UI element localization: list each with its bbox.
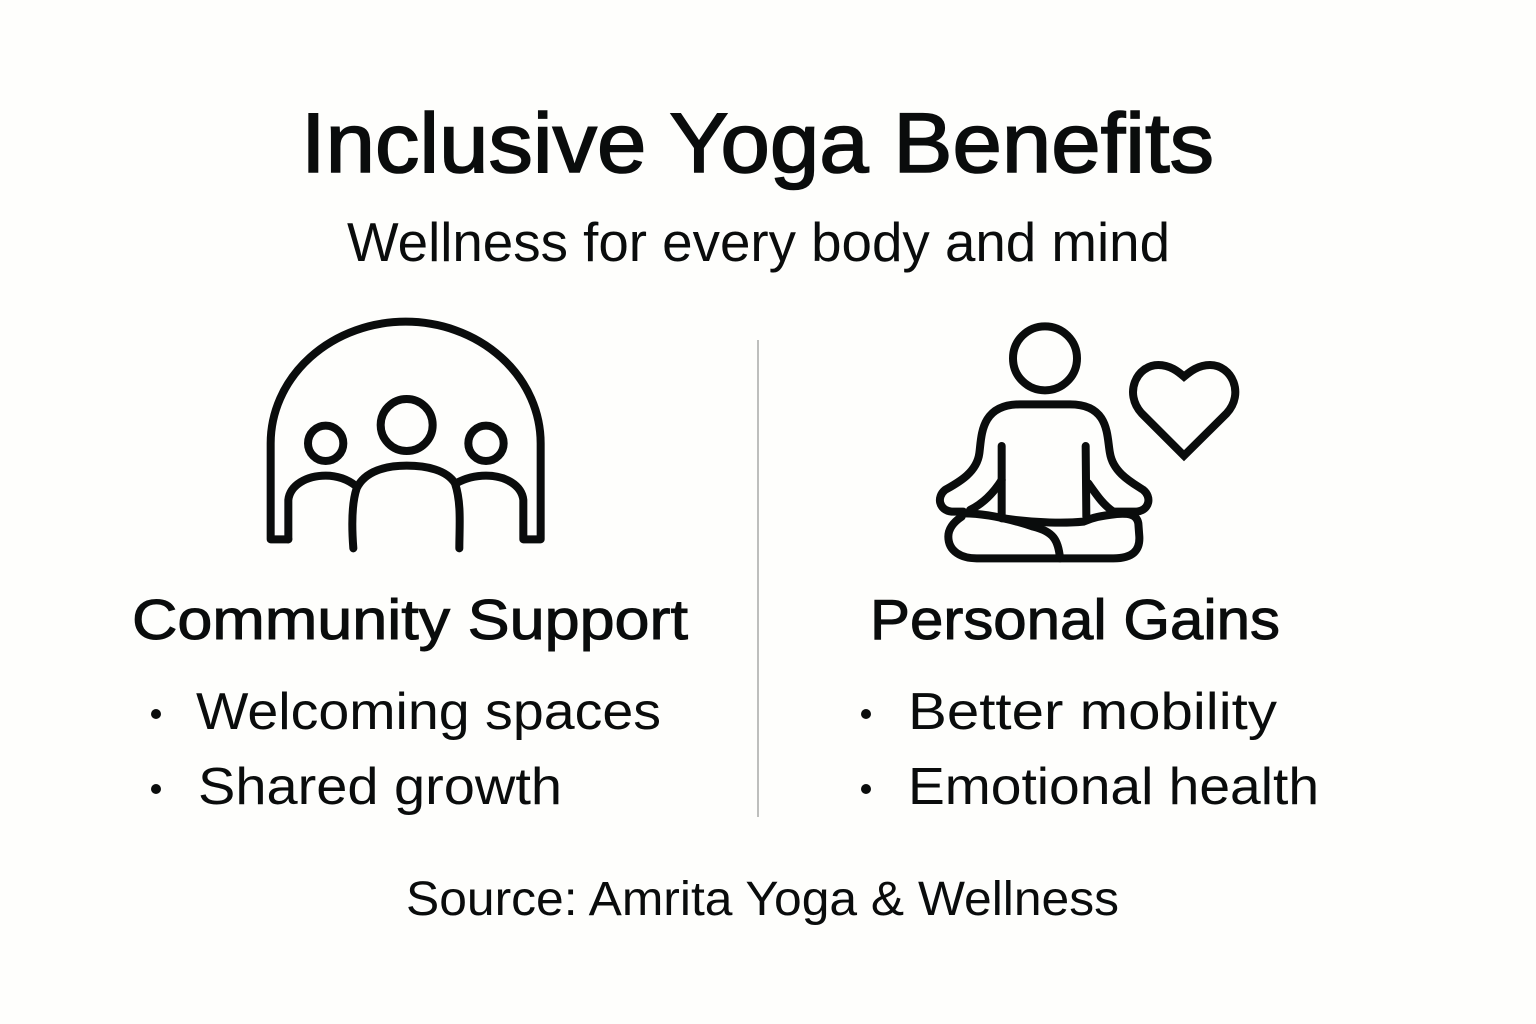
- bullet list: community: [151, 683, 661, 816]
- subtitle: Wellness for every body and mind: [347, 211, 1170, 273]
- bullet list: personal: Better mobility: [908, 683, 1277, 741]
- icon: meditating person: [940, 326, 1148, 558]
- bullet list: community: Welcoming spaces: [196, 683, 661, 741]
- title: Inclusive Yoga Benefits: [301, 96, 1214, 190]
- bullet list: community: Shared growth: [198, 758, 562, 816]
- source note: Source: Amrita Yoga & Wellness: [406, 873, 1119, 926]
- icon: group under arch: [271, 322, 541, 548]
- heading: personal gains: Personal Gains: [870, 588, 1280, 652]
- panel: personal gains: [861, 326, 1319, 816]
- panel: community support: [132, 322, 688, 816]
- bullet list: personal: [861, 683, 1319, 816]
- heading: community support: Community Support: [132, 588, 688, 652]
- bullet list: personal: Emotional health: [908, 758, 1319, 816]
- icon: heart: [1133, 365, 1235, 456]
- vertical divider: [757, 340, 759, 817]
